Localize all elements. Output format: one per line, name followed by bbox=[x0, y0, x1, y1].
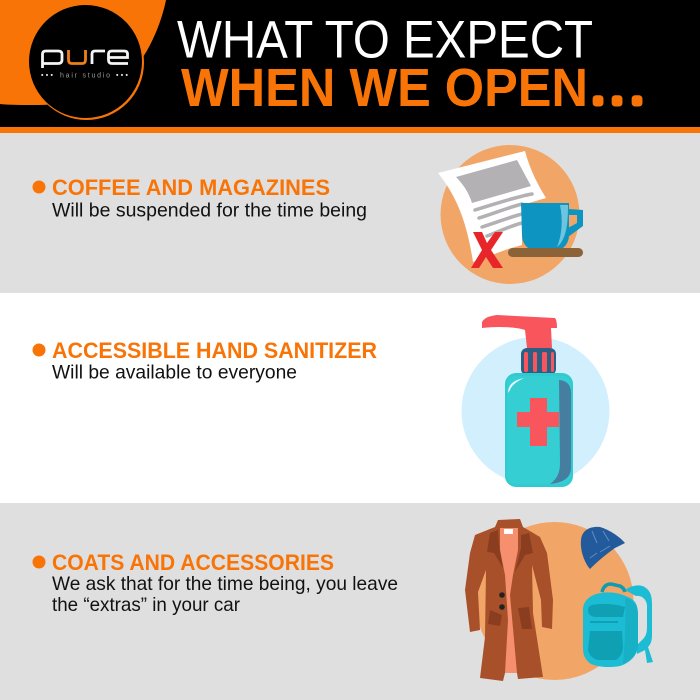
red cross bbox=[517, 398, 559, 446]
logo bbox=[29, 5, 144, 120]
text block bbox=[52, 573, 398, 616]
text block: We ask that for the time being, you leave bbox=[52, 573, 398, 595]
header band bbox=[0, 0, 700, 133]
panel: coffee and magazines bbox=[0, 133, 700, 293]
backpack bbox=[602, 584, 625, 592]
bullet bbox=[32, 556, 46, 568]
title: WHAT TO EXPECT bbox=[177, 10, 593, 70]
logo: hair studio bbox=[60, 72, 110, 80]
heading: ACCESSIBLE HAND SANITIZER bbox=[52, 338, 377, 363]
icon: red x bbox=[471, 232, 503, 268]
text block: Will be available to everyone bbox=[52, 362, 297, 384]
heading: COATS AND ACCESSORIES bbox=[52, 550, 334, 575]
icon: newspaper and coffee cup bbox=[438, 145, 583, 284]
title: WHEN WE OPEN bbox=[181, 58, 588, 118]
panel: accessible hand sanitizer bbox=[0, 293, 700, 503]
text block: Will be suspended for the time being bbox=[52, 200, 367, 222]
bullet bbox=[32, 180, 46, 194]
orange corner shape bbox=[0, 0, 166, 105]
logo: ••• bbox=[41, 72, 54, 80]
icon: coat, hat and backpack bbox=[465, 519, 653, 681]
text block: the “extras” in your car bbox=[52, 594, 240, 616]
icon: sanitizer bottle bbox=[462, 315, 610, 487]
title: ... bbox=[592, 68, 643, 112]
logo: ••• bbox=[116, 72, 129, 80]
panel: coats and accessories bbox=[0, 503, 700, 700]
title bbox=[177, 10, 643, 118]
heading: COFFEE AND MAGAZINES bbox=[52, 175, 330, 200]
bullet bbox=[32, 344, 46, 356]
hat bbox=[581, 527, 625, 569]
